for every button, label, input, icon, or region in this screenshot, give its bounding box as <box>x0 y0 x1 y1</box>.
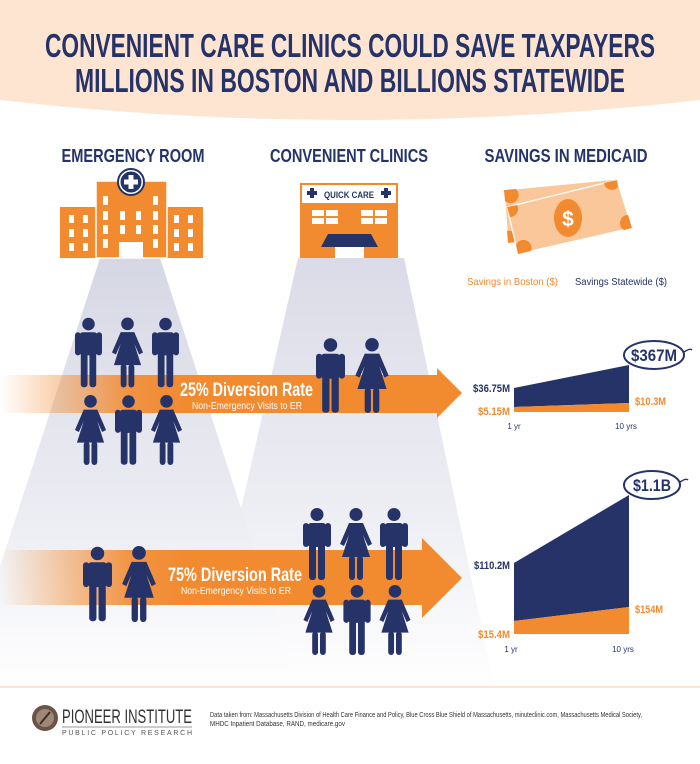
icon: hospital <box>60 169 203 258</box>
callout: $1.1B <box>624 471 688 499</box>
chart: 75% savings: $154M <box>635 604 663 616</box>
legend: Savings in Boston ($) <box>467 277 558 288</box>
title banner <box>0 0 700 120</box>
footer logo <box>32 705 192 737</box>
heading: convenient clinics: CONVENIENT CLINICS <box>270 146 428 166</box>
icon: money bills <box>504 179 632 254</box>
footer source text <box>210 712 642 728</box>
chart: 25% savings: 1 yr <box>507 422 521 431</box>
chart: 75% savings: $15.4M <box>478 629 510 641</box>
chart: 75% savings: 1 yr <box>504 645 518 654</box>
icon: clinic: QUICK CARE <box>324 190 374 201</box>
arrow: 75% diversion <box>0 538 462 618</box>
chart: 25% savings <box>473 341 692 431</box>
chart: 25% savings: $5.15M <box>478 406 510 418</box>
callout: $367M: $367M <box>631 346 677 365</box>
footer logo: PIONEER INSTITUTE <box>62 707 192 728</box>
light beam: emergency room <box>0 258 300 690</box>
chart: 25% savings: $36.75M <box>473 383 510 395</box>
footer logo: PUBLIC POLICY RESEARCH <box>62 730 192 737</box>
chart: 75% savings: 10 yrs <box>612 645 634 654</box>
chart: 25% savings: $10.3M <box>635 396 666 408</box>
footer source text: MHDC Inpatient Database, RAND, medicare.gov <box>210 721 345 728</box>
people: ER 75% <box>83 546 156 622</box>
people: clinic 25% <box>316 338 389 413</box>
callout: $1.1B: $1.1B <box>633 476 671 495</box>
arrow: 75% diversion: Non-Emergency Visits to ER <box>181 586 291 597</box>
icon: clinic <box>300 183 398 258</box>
legend <box>467 277 667 288</box>
chart: 75% savings <box>474 471 688 654</box>
heading: savings in medicaid: SAVINGS IN MEDICAID <box>484 146 648 166</box>
people: ER 25% <box>75 318 182 465</box>
legend: Savings Statewide ($) <box>575 277 667 288</box>
arrow: 25% diversion: 25% Diversion Rate <box>180 380 313 401</box>
callout: $367M <box>624 341 692 369</box>
people: clinic 75% <box>303 508 411 655</box>
icon: money bills: $ <box>562 208 574 231</box>
arrow: 25% diversion <box>0 368 462 418</box>
light beam: clinics <box>200 258 495 690</box>
chart: 75% savings: $110.2M <box>474 560 510 572</box>
arrow: 75% diversion: 75% Diversion Rate <box>168 565 302 586</box>
arrow: 25% diversion: Non-Emergency Visits to ER <box>192 401 302 412</box>
chart: 25% savings: 10 yrs <box>615 422 637 431</box>
heading: emergency room: EMERGENCY ROOM <box>62 146 204 166</box>
